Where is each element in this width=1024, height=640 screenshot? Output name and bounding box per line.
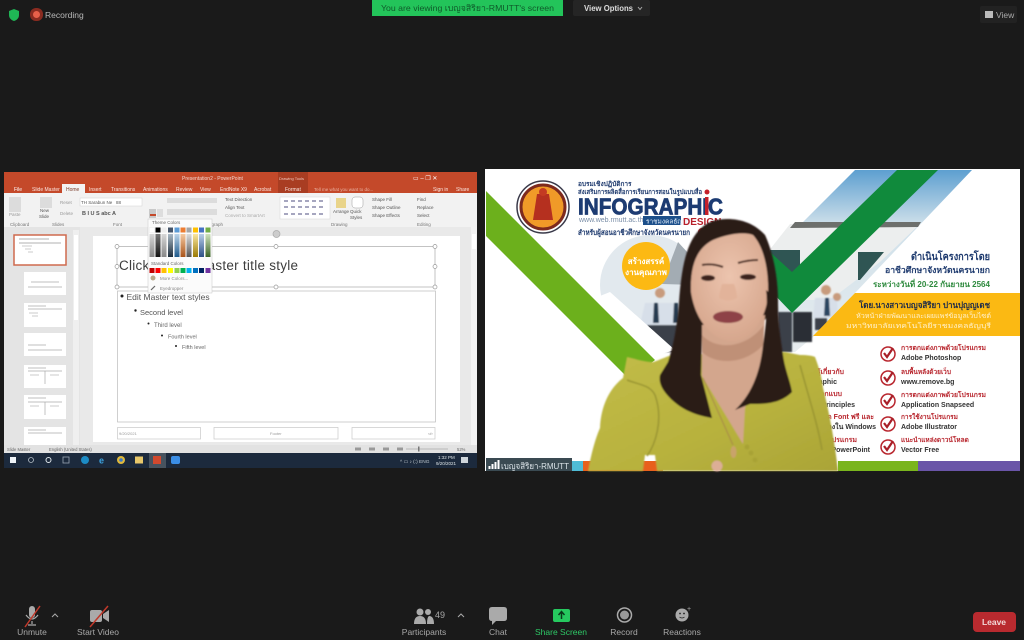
green diagonal band	[486, 191, 655, 380]
neck and chest	[702, 315, 765, 444]
eyes and brows	[701, 260, 758, 281]
windows taskbar: e	[99, 456, 104, 466]
windows taskbar: ^ ▭ ♪ (:) ENG	[400, 459, 430, 465]
body placeholder	[118, 291, 436, 422]
standard color row	[150, 268, 210, 273]
view button	[980, 6, 1017, 23]
title bar and tabs: Review	[176, 187, 193, 193]
unmute button	[17, 606, 58, 637]
left topic list (partly hidden): ดาวน์โหลด Font ฟรี และ	[797, 412, 874, 421]
ribbon: Reset	[60, 200, 73, 205]
poster title: www.web.rmutt.ac.th	[578, 217, 644, 224]
yellow speaker band: โดย.นางสาวเบญจสิริยา ปานปุญญเดช	[858, 300, 990, 311]
icon: security shield	[9, 9, 19, 21]
yellow badge: สร้างสรรค์	[628, 256, 664, 266]
jacket folds	[627, 365, 822, 456]
panel: PowerPoint screen share	[4, 172, 477, 468]
left topic list (partly hidden): Infographic	[799, 379, 837, 386]
view options button: View Options	[584, 3, 633, 13]
record button: Record	[610, 627, 638, 637]
slide canvas	[93, 230, 460, 442]
thumbnail pane	[4, 227, 80, 445]
reactions button: Reactions	[663, 627, 701, 637]
color picker dropdown: Standard Colors	[151, 261, 184, 266]
participants button: Participants	[402, 627, 446, 637]
window frame	[4, 172, 477, 468]
ribbon: Clipboard	[10, 222, 30, 227]
slide thumbnail 6	[24, 395, 66, 419]
yellow speaker band: หัวหน้าฝ่ายพัฒนาและเผยแพร่ข้อมูลเว็บไซต์	[856, 311, 991, 320]
topic 4: การใช้งานโปรแกรม	[901, 412, 958, 421]
people in left photo	[640, 288, 683, 352]
title bar and tabs: Slide Master	[32, 187, 60, 193]
left topic list (partly hidden): หลักการออกแบบ	[791, 390, 843, 398]
jacket buttons	[744, 444, 758, 462]
ribbon: Align Text	[225, 205, 245, 210]
ribbon: Paragraph	[202, 222, 224, 227]
lips	[713, 311, 743, 323]
topic 1: Adobe Photoshop	[901, 355, 961, 362]
unmute button: Unmute	[17, 627, 47, 637]
title bar and tabs: Format	[285, 187, 301, 193]
theme color shades	[150, 234, 210, 257]
organiser block: ระหว่างวันที่ 20-22 กันยายน 2564	[873, 278, 991, 289]
view options button	[573, 0, 650, 16]
poster title: DESIGN	[683, 217, 721, 228]
topic 5: แนะนำแหล่งดาวน์โหลด	[901, 435, 969, 444]
topic 5	[881, 435, 969, 454]
ribbon	[4, 193, 477, 227]
slide workspace	[80, 227, 472, 445]
topic 2: ลบพื้นหลังด้วยเว็บ	[901, 366, 951, 376]
topic 5: Vector Free	[901, 447, 939, 454]
presenter	[588, 219, 838, 472]
title bar and tabs: EndNote X9	[220, 187, 247, 193]
people in right photo	[778, 285, 841, 352]
title bar and tabs: Animations	[143, 187, 168, 193]
body placeholder: Second level	[140, 308, 183, 317]
left topic list (partly hidden): Design Principles	[796, 402, 855, 409]
recording indicator: Recording	[45, 10, 84, 20]
start video button	[77, 606, 119, 637]
poster title	[578, 180, 723, 238]
topic 3: Application Snapseed	[901, 402, 974, 409]
title bar and tabs: Transitions	[111, 187, 136, 193]
topic 3: การตกแต่งภาพด้วยโปรแกรม	[901, 390, 986, 399]
yellow badge: งานคุณภาพ	[625, 268, 667, 278]
poster title: ส่งเสริมการผลิตสื่อการเรียนการสอนในรูปแบบสื่อ	[578, 186, 702, 197]
hair	[660, 219, 778, 418]
ribbon: Drawing	[331, 222, 348, 227]
color picker dropdown: Theme Colors	[152, 220, 181, 225]
ribbon: Find	[417, 197, 426, 202]
topic 4: Adobe Illustrator	[901, 424, 957, 431]
topic 2	[881, 366, 954, 386]
participants button: 49	[435, 610, 445, 620]
title placeholder	[115, 230, 437, 289]
body placeholder: Fifth level	[182, 345, 206, 351]
slide thumbnail 1 (selected)	[14, 235, 66, 265]
right topic list	[881, 343, 986, 454]
record button	[610, 608, 638, 637]
bottom toolbar	[17, 606, 1016, 637]
view button: View	[996, 10, 1015, 20]
necklace	[703, 378, 733, 445]
theme color row	[150, 228, 210, 232]
color picker dropdown	[148, 219, 212, 293]
windows taskbar: 9/20/2021	[436, 461, 457, 466]
title bar and tabs: Presentation2 - PowerPoint	[182, 176, 243, 182]
leave button: Leave	[982, 617, 1006, 627]
poster title: สำหรับผู้สอนอาชีวศึกษาจังหวัดนครนายก	[578, 228, 690, 238]
title bar and tabs: View	[200, 187, 211, 193]
title placeholder: Click to edit Master title style	[119, 258, 298, 273]
green check mark	[770, 170, 938, 313]
poster title: INFOGRAPHIC	[578, 194, 723, 220]
topic 1: การตกแต่งภาพด้วยโปรแกรม	[901, 343, 986, 352]
organiser block: ดำเนินโครงการโดย	[911, 250, 990, 263]
topic 2: www.remove.bg	[900, 379, 954, 386]
ribbon: Replace	[417, 205, 434, 210]
body placeholder: Edit Master text styles	[126, 292, 210, 302]
title bar and tabs: Home	[66, 187, 80, 193]
participant name tag	[486, 458, 572, 471]
ribbon: Slides	[52, 222, 65, 227]
slide thumbnail 2	[24, 272, 66, 295]
title bar and tabs: Acrobat	[254, 187, 272, 193]
windows taskbar: 1:32 PM	[438, 455, 455, 460]
footer placeholders	[118, 428, 435, 439]
poster background	[485, 169, 1020, 471]
status bar: English (United States)	[49, 447, 92, 452]
ribbon: Shape Fill	[372, 197, 392, 202]
title bar and tabs: Sign in	[433, 187, 449, 193]
topic 4	[881, 412, 958, 431]
poster title: ราชมงคลธัญบุรี	[646, 218, 691, 226]
light circle photo	[600, 235, 700, 335]
title bar and tabs: ▭ – ❐ ✕	[413, 175, 437, 182]
slide thumbnail 3	[24, 303, 66, 327]
title bar and tabs: Insert	[89, 187, 102, 193]
nose	[719, 284, 737, 300]
body placeholder: Fourth level	[168, 334, 197, 340]
color picker dropdown: Eyedropper	[160, 286, 184, 291]
organiser block: อาชีวศึกษาจังหวัดนครนายก	[885, 265, 990, 275]
topic 1	[881, 343, 986, 362]
chat button: Chat	[489, 627, 508, 637]
footer placeholders: 9/20/2021	[119, 431, 138, 436]
ribbon: B I U S abc A	[82, 211, 116, 217]
organiser block	[873, 250, 991, 289]
participant name tag: เบญจสิริยา-RMUTT	[501, 461, 569, 471]
ribbon: New	[40, 208, 50, 213]
leave button	[973, 612, 1016, 632]
poster title: อบรมเชิงปฏิบัติการ	[578, 180, 632, 188]
title bar and tabs: Share	[456, 187, 470, 193]
ribbon: Slide	[39, 214, 50, 219]
top bar	[9, 0, 1017, 23]
right hair lock	[735, 290, 792, 410]
reactions button: +	[687, 606, 691, 613]
ribbon: Select	[417, 213, 430, 218]
status bar	[4, 445, 477, 453]
pendant	[730, 446, 736, 458]
share screen button: Share Screen	[535, 627, 587, 637]
white diagonal band	[590, 292, 675, 357]
status bar: 52%	[457, 447, 466, 452]
participants button	[402, 608, 464, 637]
ribbon: Styles	[350, 215, 363, 220]
ribbon: Shape Outline	[372, 205, 401, 210]
slide thumbnail 5	[24, 365, 66, 388]
yellow badge	[622, 242, 670, 290]
hand	[712, 460, 722, 472]
left topic list (partly hidden): Microsoft PowerPoint	[798, 447, 871, 454]
left topic list (partly hidden): ติดตั้งลงใน Windows	[810, 420, 876, 431]
ribbon: Paste	[9, 212, 21, 217]
ribbon: Convert to SmartArt	[225, 213, 266, 218]
status bar: Slide Master	[7, 447, 31, 452]
left topic list (partly hidden): ความรู้เกี่ยวกับ	[800, 366, 845, 377]
diagonal photo band	[760, 170, 972, 352]
start video button: Start Video	[77, 627, 119, 637]
panel: presenter video with infographic poster	[485, 169, 1020, 472]
slide thumbnail 7	[24, 427, 66, 445]
bottom colour strip	[572, 461, 1020, 471]
ribbon: 88	[116, 200, 122, 205]
title bar and tabs: Drawing Tools	[279, 176, 304, 181]
body placeholder: Third level	[154, 323, 182, 329]
footer placeholders: ‹#›	[428, 431, 434, 436]
viewing banner	[372, 0, 563, 16]
ribbon: Font	[113, 222, 123, 227]
college seal	[517, 181, 569, 233]
share screen button	[535, 609, 587, 637]
title bar and tabs	[4, 172, 477, 193]
ribbon: Editing	[417, 222, 431, 227]
color picker dropdown: More Colors...	[160, 276, 188, 281]
topic 3	[881, 390, 986, 409]
slide thumbnail 4	[24, 333, 66, 356]
ribbon: Delete	[60, 211, 74, 216]
ribbon: Arrange	[333, 209, 350, 214]
ribbon: Text Direction	[225, 197, 253, 202]
workspace scrollbar	[471, 227, 477, 445]
ribbon: TH Sarabun Ne	[81, 200, 113, 205]
left topic list (partly hidden)	[791, 366, 876, 454]
face	[691, 233, 768, 341]
title bar and tabs: Tell me what you want to do...	[314, 187, 373, 192]
viewing banner: You are viewing เบญจสิริยา-RMUTT's screen	[381, 3, 554, 13]
jacket	[588, 352, 838, 471]
ribbon: Shape Effects	[372, 213, 401, 218]
ribbon: Quick	[350, 209, 362, 214]
title bar and tabs: File	[14, 187, 22, 193]
footer placeholders: Footer	[270, 431, 282, 436]
neck shadow	[702, 325, 764, 361]
grey building wedge	[662, 242, 696, 285]
yellow speaker band	[813, 293, 1020, 336]
windows taskbar	[4, 453, 477, 468]
left topic list (partly hidden): การใช้โปรแกรม	[808, 435, 857, 444]
chat button	[489, 607, 508, 637]
recording indicator	[30, 8, 84, 21]
reactions button	[663, 606, 701, 637]
yellow speaker band: มหาวิทยาลัยเทคโนโลยีราชมงคลธัญบุรี	[846, 322, 992, 330]
